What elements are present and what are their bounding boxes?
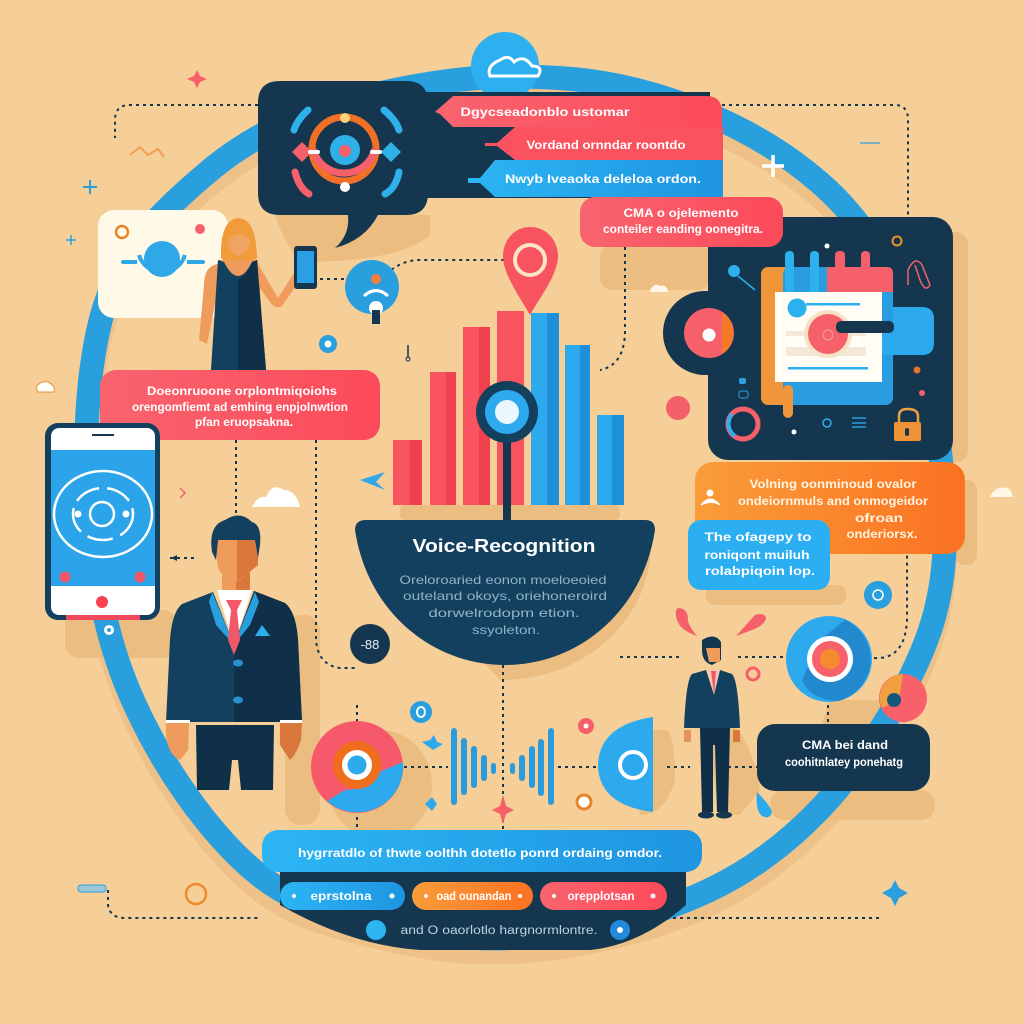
-88 badge: -88 <box>361 637 379 652</box>
dark text box: CMA bei dand <box>802 740 888 752</box>
coral text box: Doeonruoone orplontmiqoiohs <box>147 386 337 398</box>
waveform <box>451 728 554 805</box>
target circle <box>786 616 872 702</box>
orange text box <box>695 462 965 554</box>
bottom blue banner: hygrratdlo of thwte oolthh dotetlo ponrd ordaing omdor. <box>298 848 662 860</box>
coral text box: orengomfiemt ad emhing enpjolnwtion <box>132 402 348 414</box>
body text: dorwelrodopm etion. <box>428 606 580 620</box>
footer note <box>366 920 630 940</box>
blue text box <box>688 520 830 590</box>
red callout: conteiler eanding oonegitra. <box>603 224 763 236</box>
body text: outeland okoys, oriehoneroird <box>403 589 607 603</box>
soft shadows <box>65 215 977 840</box>
coral text box: pfan eruopsakna. <box>195 417 293 429</box>
pie decoration <box>879 674 927 722</box>
small man <box>684 636 740 818</box>
pill blue <box>280 882 405 910</box>
lock icon <box>894 409 921 441</box>
bottom blue banner <box>262 830 702 872</box>
half disc icon <box>598 717 653 812</box>
stack of folders <box>761 251 893 418</box>
panel: document dashboard <box>663 217 953 460</box>
document <box>775 292 894 382</box>
body text <box>400 573 607 637</box>
card with sensor icon <box>98 210 228 318</box>
red callout: CMA o ojelemento <box>624 208 738 220</box>
pill blue: eprstolna <box>310 891 372 903</box>
dark text box <box>757 724 930 791</box>
pill orange: oad ounandan <box>436 891 512 903</box>
blue tab <box>866 307 934 355</box>
banner 2 <box>485 127 723 160</box>
banner 1: Dgycseadonblo ustomar <box>460 107 630 119</box>
phone <box>45 423 160 620</box>
microphone icon <box>476 381 538 522</box>
orange text box: ondeiornmuls and onmogeidor <box>738 496 929 508</box>
large man <box>166 515 302 790</box>
ring <box>87 77 945 938</box>
location pin <box>503 227 558 315</box>
banner 1 <box>435 96 722 127</box>
footer note: and O oaorlotlo hargnormlontre. <box>400 925 598 937</box>
dark band behind banners <box>420 92 710 198</box>
scattered decorations <box>36 70 1013 906</box>
-88 badge <box>350 624 390 664</box>
panel: speech bubble with voice icon <box>258 81 428 248</box>
blue text box: The ofagepy to <box>704 532 812 544</box>
orange text box: onderiorsx. <box>846 529 918 541</box>
small ring dot <box>319 335 337 353</box>
bar chart <box>393 311 624 505</box>
mic badge <box>345 260 399 324</box>
body text: Oreloroaried eonon moeloeoied <box>400 573 606 587</box>
small blue badge <box>864 581 892 609</box>
pill red <box>540 882 667 910</box>
orange text box: Volning oonminoud ovalor <box>750 479 917 491</box>
small pins <box>676 608 772 817</box>
ring shadow <box>87 91 945 952</box>
connector lines <box>108 105 908 918</box>
small decorations around wave <box>410 701 594 824</box>
banner 3: Nwyb Iveaoka deleloa ordon. <box>505 174 701 186</box>
orange text box: ofroan <box>855 513 903 525</box>
body text: ssyoleton. <box>472 623 540 637</box>
red callout <box>580 197 783 247</box>
blue text box: rolabpiqoin lop. <box>705 566 815 578</box>
bottom dark panel <box>262 830 702 950</box>
woman with phone <box>199 218 317 370</box>
title: Voice-Recognition <box>412 536 596 556</box>
coral text box <box>100 370 380 440</box>
small markers near center <box>360 345 690 490</box>
vinyl disc <box>663 291 747 375</box>
cloud badge top <box>471 32 540 100</box>
pill red: orepplotsan <box>568 891 634 903</box>
banner 3 <box>468 160 723 197</box>
pie chart left <box>311 721 403 813</box>
dark text box: coohitnlatey ponehatg <box>785 757 903 769</box>
banner 2: Vordand ornndar roontdo <box>526 140 686 152</box>
title bowl <box>355 520 655 665</box>
pill orange <box>412 882 533 910</box>
blue text box: roniqont muiluh <box>704 550 810 562</box>
